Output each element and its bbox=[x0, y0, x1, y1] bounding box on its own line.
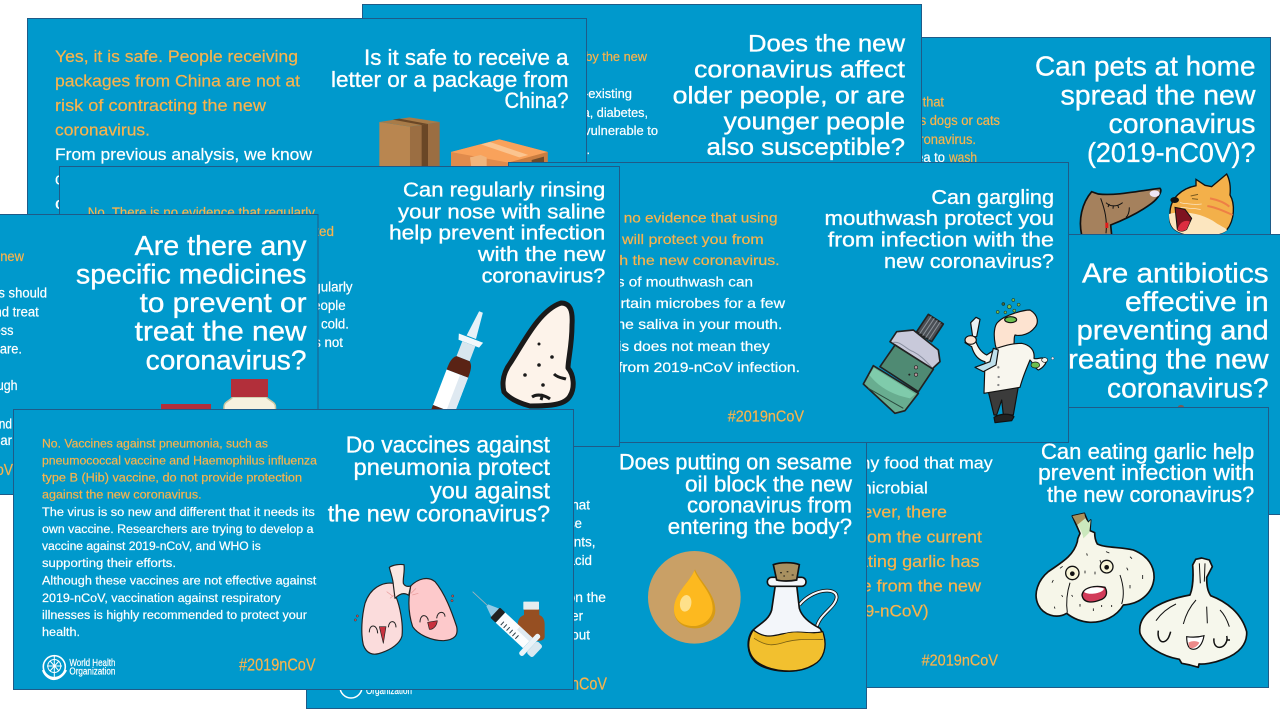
heading: mouthwash bbox=[824, 186, 1054, 273]
body text: vaccines: type B (Hib) vaccine, do not provide protection bbox=[42, 470, 302, 484]
panel: can pets spread the coronavirus bbox=[712, 38, 1270, 318]
heading: garlic: prevent infection with bbox=[1038, 460, 1254, 485]
body text: sesame: can kill the 2019-nCoV on surfaces. These bbox=[334, 516, 582, 531]
heading: saline bbox=[389, 179, 606, 287]
heading: antibiotics bbox=[1060, 257, 1269, 403]
icon: oil drop and bottle bbox=[648, 551, 837, 671]
body text: mouthwash: A few brands of mouthwash can bbox=[536, 274, 753, 290]
heading: vaccines: you against bbox=[430, 477, 551, 503]
body text: mouthwash: protect you from 2019-nCoV infection. bbox=[536, 359, 800, 375]
logo: World Health Organization: Organization bbox=[69, 666, 115, 677]
panel: can eating garlic help bbox=[710, 408, 1268, 688]
body text: mouthwash: However, this does not mean they bbox=[536, 338, 770, 354]
heading: medicines: specific medicines bbox=[76, 258, 306, 289]
panel: are antibiotics effective bbox=[720, 234, 1280, 514]
heading: medicines: to prevent or bbox=[140, 287, 306, 318]
icon: nose bbox=[503, 303, 573, 406]
icon: mouthwash bottle bbox=[863, 314, 943, 413]
heading: garlic bbox=[1038, 439, 1254, 507]
logo: World Health Organization bbox=[43, 655, 115, 679]
icon: cardboard boxes bbox=[379, 117, 548, 170]
heading: sesame: oil block the new bbox=[685, 472, 852, 497]
body text: vaccines: 2019-nCoV, vaccination against respiratory bbox=[42, 591, 282, 605]
body text: pets: can be infected with the new coronavirus. bbox=[739, 132, 976, 147]
heading: antibiotics: effective in bbox=[1125, 286, 1269, 317]
heading: packages: Is it safe to receive a bbox=[364, 45, 569, 70]
heading: mouthwash: new coronavirus? bbox=[884, 250, 1054, 273]
heading: garlic: Can eating garlic help bbox=[1041, 439, 1254, 464]
heading: vaccines bbox=[328, 432, 551, 526]
body text: pets: companion animals/pets such as dogs or cats bbox=[739, 113, 1000, 128]
icon: antibiotic pill tip bbox=[1178, 405, 1184, 409]
heading: mouthwash: Can gargling bbox=[931, 186, 1054, 209]
body text: sesame bbox=[334, 497, 606, 642]
logo: World Health Organization: World Health bbox=[69, 658, 115, 669]
body text: older people: Older people, and people with pre-existing bbox=[390, 86, 632, 101]
body text: older people: heart disease) appear to be more vulnerable to bbox=[390, 123, 658, 138]
body text: saline: No. There is no evidence that regularly bbox=[88, 205, 315, 220]
body text: older people: coronavirus (2019-nCoV). bbox=[390, 68, 530, 82]
heading: pets: Can pets at home bbox=[1035, 51, 1256, 82]
body text: garlic bbox=[737, 453, 993, 621]
body text: sesame: either solvents, 75% ethanol, peracetic acid bbox=[334, 553, 592, 568]
body text: mouthwash: No. There is no evidence that using bbox=[536, 210, 778, 226]
body text: packages: Yes, it is safe. People receiving bbox=[55, 47, 298, 66]
body text: saline: recover more quickly from the common cold. bbox=[88, 317, 349, 332]
body text: vaccines: vaccine against 2019-nCoV, and WHO is bbox=[42, 539, 261, 553]
body text: pets: wash bbox=[948, 150, 977, 165]
body text: older people: becoming severely ill with the virus. bbox=[390, 142, 590, 157]
body text: packages: From previous analysis, we know bbox=[55, 145, 313, 164]
body text: sesame: However, they have little or no impact on the bbox=[334, 590, 606, 605]
body text: older people: medical conditions (such as asthma, diabetes, bbox=[390, 105, 648, 120]
heading: packages: letter or a package from bbox=[331, 67, 568, 92]
body text: sesame: include bleach/chlorine-based disinfectants, bbox=[334, 535, 596, 550]
body text: older people bbox=[390, 49, 658, 157]
body text: saline bbox=[88, 205, 353, 350]
heading: saline: your nose with saline bbox=[398, 200, 605, 223]
heading: older people: Does the new bbox=[748, 31, 905, 58]
body text: vaccines: Although these vaccines are not effective against bbox=[42, 574, 317, 588]
heading: mouthwash: from infection with the bbox=[828, 229, 1054, 252]
heading: packages bbox=[331, 45, 569, 113]
icon: nasal spray bbox=[428, 307, 493, 423]
body text: sesame: your nose. These can damage skin without bbox=[334, 627, 590, 642]
heading: medicines bbox=[76, 230, 307, 375]
heading: medicines: treat the new bbox=[135, 316, 307, 347]
heading: sesame: entering the body? bbox=[668, 514, 852, 539]
body text: saline: There is some limited evidence that regularly bbox=[88, 280, 353, 295]
panel: does sesame oil block the coronavirus bbox=[306, 430, 866, 708]
body text: saline: rinsing the nose with saline can help people bbox=[88, 298, 346, 313]
heading: older people: also susceptible? bbox=[706, 134, 905, 161]
body text: vaccines: No. Vaccines against pneumonia, such as bbox=[42, 436, 268, 450]
body text: garlic: coronavirus (2019-nCoV) bbox=[737, 602, 929, 621]
heading: pets: coronavirus bbox=[1108, 108, 1256, 139]
body text: vaccines: own vaccine. Researchers are trying to develop a bbox=[42, 522, 314, 536]
body text: garlic: outbreak that eating garlic has bbox=[737, 552, 980, 571]
heading: medicines: coronavirus? bbox=[146, 344, 306, 375]
body text: vaccines: The virus is so new and different that it needs its bbox=[42, 505, 315, 519]
body text: vaccines: supporting their efforts. bbox=[42, 556, 176, 570]
heading: packages: China? bbox=[504, 88, 568, 113]
heading: vaccines: Do vaccines against bbox=[346, 432, 551, 458]
panel: do vaccines against pneumonia protect bbox=[14, 410, 574, 690]
icon: dog and cat bbox=[1080, 174, 1233, 236]
panel: is it safe to receive a package bbox=[28, 18, 586, 298]
panel: can gargling mouthwash protect you bbox=[508, 162, 1068, 442]
heading: antibiotics: preventing and bbox=[1077, 314, 1269, 345]
logo: WHO on sesame card: Organization bbox=[366, 686, 412, 697]
body text: packages: coronaviruses do not survive long bbox=[55, 170, 300, 188]
heading: older people: coronavirus affect bbox=[694, 57, 905, 84]
body text: saline: However, regularly rinsing the nose has not bbox=[88, 335, 343, 350]
icon: man gargling bbox=[965, 298, 1054, 423]
heading: sesame: Does putting on sesame bbox=[619, 449, 852, 474]
panel: are there specific medicines bbox=[0, 214, 318, 494]
icon: medicine bottles bbox=[161, 379, 276, 416]
heading: older people bbox=[673, 31, 905, 161]
body text: saline: rinsing the nose with saline has protected bbox=[88, 224, 334, 239]
heading: antibiotics: treating the new bbox=[1060, 343, 1269, 374]
body text: sesame: virus if you put them on the skin and under bbox=[334, 609, 583, 624]
heading: saline: coronavirus? bbox=[482, 264, 605, 287]
body text: pets: At present, there is no evidence that bbox=[739, 95, 944, 110]
body text: vaccines: against the new coronavirus. bbox=[42, 488, 202, 502]
heading: sesame bbox=[619, 449, 852, 539]
panel: does the coronavirus affect older people bbox=[362, 4, 922, 284]
icon: two garlic bulbs bbox=[1036, 513, 1247, 667]
body text: mouthwash: minutes in the saliva in your mouth. bbox=[536, 316, 782, 332]
heading: saline: with the new bbox=[477, 243, 606, 266]
heading: antibiotics: coronavirus? bbox=[1107, 372, 1269, 403]
hashtag: sesame: #2019nCoV bbox=[531, 673, 607, 693]
body text: garlic: have some antimicrobial bbox=[737, 478, 928, 497]
body text: vaccines: pneumococcal vaccine and Haemophilus influenza bbox=[42, 454, 317, 468]
body text: packages: coronavirus. bbox=[55, 120, 150, 140]
body text: mouthwash bbox=[536, 210, 800, 375]
heading: vaccines: the new coronavirus? bbox=[328, 500, 550, 526]
heading: older people: older people, or are bbox=[673, 82, 905, 110]
icon: smiling lungs bbox=[354, 564, 457, 654]
body text: garlic: protected people from the new bbox=[737, 577, 982, 596]
heading: antibiotics: Are antibiotics bbox=[1082, 257, 1269, 288]
body text: packages: risk of contracting the new bbox=[55, 96, 267, 115]
logo: WHO on sesame card bbox=[340, 676, 412, 698]
body text: sesame: There are some chemical disinfectants that bbox=[334, 497, 590, 512]
body text: mouthwash: infection with the new coronavirus. bbox=[536, 252, 780, 268]
heading: pets: spread the new bbox=[1060, 80, 1256, 111]
body text: pets: However, it is always a good idea to bbox=[739, 150, 945, 165]
body text: garlic: Garlic is a healthy food that may bbox=[737, 453, 993, 472]
body text: vaccines bbox=[42, 436, 317, 639]
body text: mouthwash: mouthwash will protect you from bbox=[536, 231, 764, 247]
body text: vaccines: illnesses is highly recommended to protect your bbox=[42, 608, 307, 622]
hashtag: mouthwash: #2019nCoV bbox=[728, 409, 804, 426]
body text: packages: on objects, such as letters bbox=[55, 194, 275, 213]
heading: sesame: coronavirus from bbox=[687, 493, 852, 518]
icon: syringe and vial bbox=[463, 581, 547, 662]
hashtag: vaccines: #2019nCoV bbox=[239, 655, 316, 675]
body text: mouthwash: eliminate certain microbes for a few bbox=[536, 295, 786, 311]
body text: medicines bbox=[0, 249, 47, 448]
body text: vaccines: health. bbox=[42, 625, 80, 639]
heading: mouthwash: mouthwash protect you bbox=[824, 207, 1054, 230]
body text: garlic: properties. However, there bbox=[737, 503, 947, 522]
body text: packages: packages from China are not at bbox=[55, 72, 300, 90]
heading: pets bbox=[1035, 51, 1256, 168]
heading: vaccines: pneumonia protect bbox=[354, 454, 551, 480]
body text: older people: People of all ages can be infected by the new bbox=[390, 49, 648, 64]
heading: saline: Can regularly rinsing bbox=[403, 179, 605, 202]
heading: older people: younger people bbox=[724, 108, 905, 136]
hashtag: garlic: #2019nCoV bbox=[922, 653, 998, 670]
heading: garlic: the new coronavirus? bbox=[1047, 482, 1254, 507]
body text: pets bbox=[739, 95, 1000, 165]
heading: pets: (2019-nC0V)? bbox=[1087, 137, 1256, 168]
body text: packages bbox=[55, 47, 313, 213]
body text: garlic: is no evidence from the current bbox=[737, 528, 982, 547]
panel: can rinsing your nose with saline help bbox=[60, 166, 620, 446]
heading: medicines: Are there any bbox=[135, 230, 307, 261]
heading: saline: help prevent infection bbox=[389, 221, 605, 244]
